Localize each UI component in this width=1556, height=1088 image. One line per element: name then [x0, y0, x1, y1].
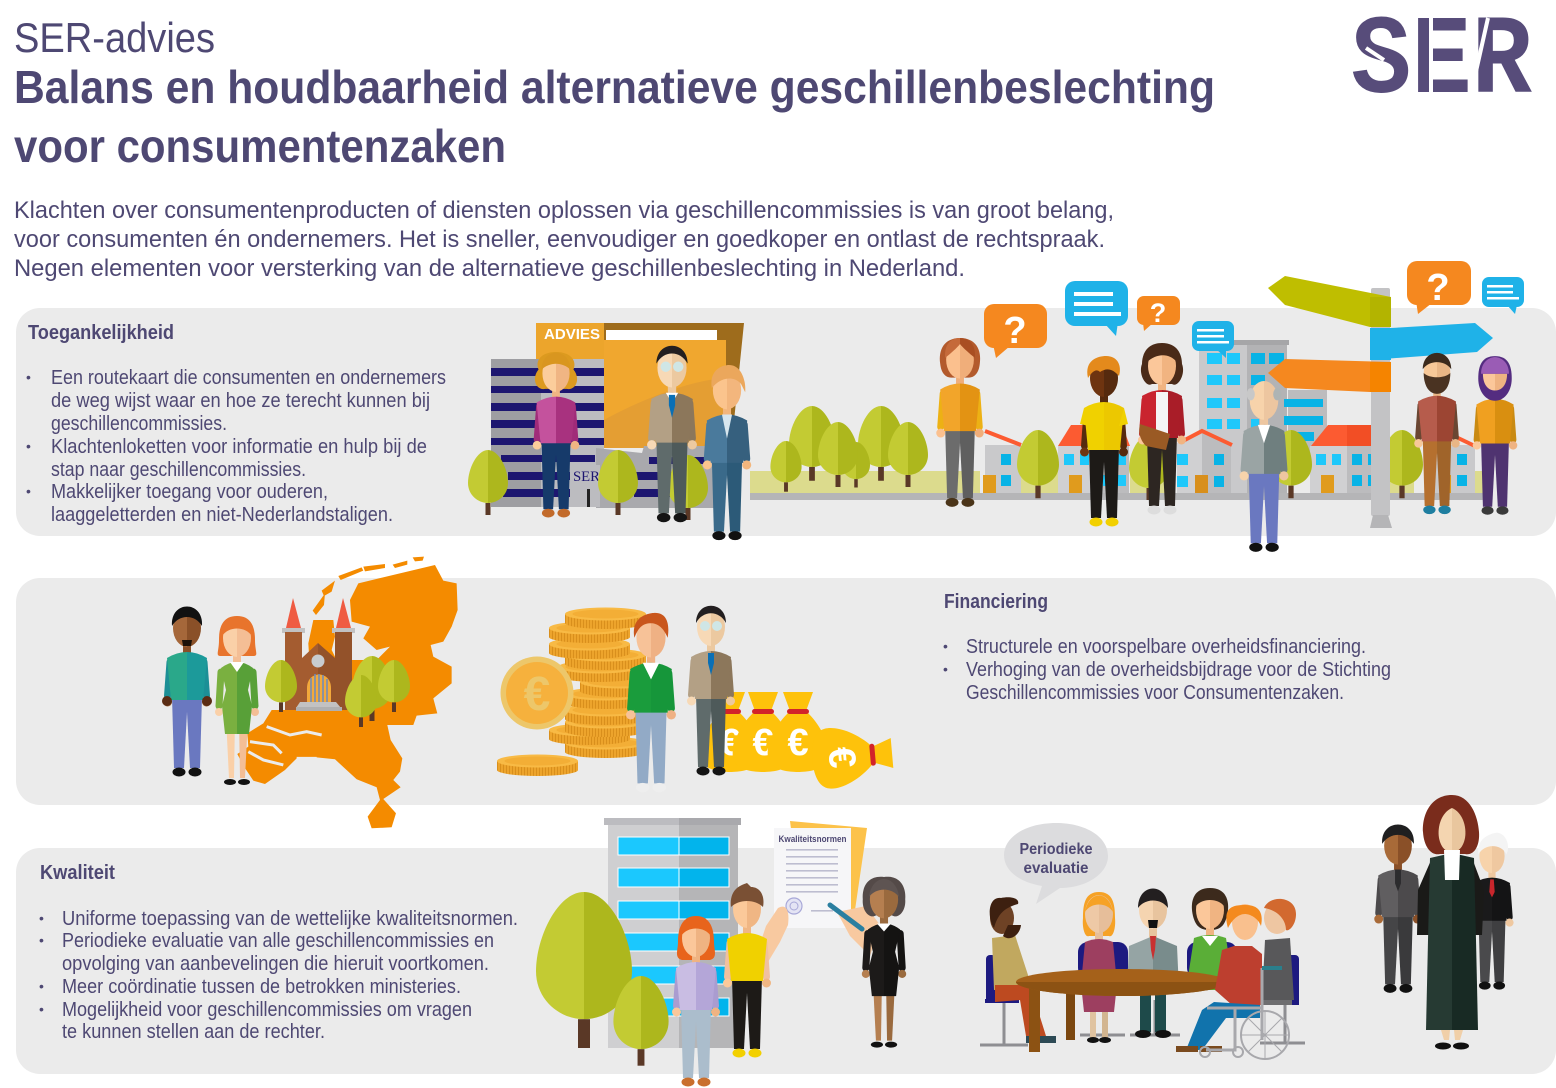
big euro coin: € — [524, 668, 550, 721]
speech bubble: question: ? — [1426, 267, 1450, 309]
text block: Toegankelijkheid: • — [26, 483, 31, 499]
text block: Kwaliteit: • — [39, 1001, 44, 1017]
woman in green sweater seated — [1186, 888, 1234, 990]
text block: Kwaliteit: Kwaliteit — [40, 862, 115, 884]
text block: Kwaliteit: opvolging van aanbevelingen die hieruit voortkomen. — [62, 953, 489, 975]
house — [1058, 425, 1130, 493]
tower block — [1199, 340, 1327, 493]
subtitle: SER-advies — [14, 14, 215, 61]
text block: Toegankelijkheid: • — [26, 369, 31, 385]
text block: Kwaliteit: Uniforme toepassing van de wettelijke kwaliteitsnormen. — [62, 908, 518, 930]
text block: Financiering: • — [943, 638, 948, 654]
person: boy in yellow shirt — [723, 883, 771, 1058]
text block: Toegankelijkheid: Een routekaart die consumenten en ondernemers — [51, 367, 446, 389]
person: man in yellow shirt — [1080, 356, 1128, 526]
speech bubble: Periodieke evaluatie — [1004, 823, 1108, 904]
text block: Toegankelijkheid: laaggeletterden en niet-Nederlandstaligen. — [51, 504, 393, 526]
illustration: ADVIES building — [468, 323, 744, 520]
panel: Kwaliteit — [16, 848, 1556, 1074]
illustration: meeting table with people — [980, 888, 1305, 1059]
panel: Toegankelijkheid — [16, 308, 1556, 536]
person: woman in red jacket with bag — [1138, 343, 1186, 514]
text block: Kwaliteit: • — [39, 910, 44, 926]
text block: Kwaliteit: Mogelijkheid voor geschillencommissies om vragen — [62, 999, 472, 1021]
illustration: ADVIES building: SER — [573, 469, 600, 485]
signpost with arrows — [1268, 276, 1493, 528]
text block: Kwaliteit: te kunnen stellen aan de rechter. — [62, 1021, 325, 1043]
speech bubble: question — [1137, 296, 1180, 331]
text block: Kwaliteit — [39, 862, 518, 1043]
arrow: orange — [1268, 359, 1391, 392]
intro text: Klachten over consumentenproducten of diensten oplossen via geschillencommissies is van groot belang, — [14, 197, 1114, 224]
person: old man in grey jacket — [1240, 381, 1288, 552]
illustration: street with houses and trees — [750, 340, 1490, 500]
text block: Toegankelijkheid: de weg wijst waar en hoe ze terecht kunnen bij — [51, 390, 430, 412]
SER logo: SER — [1351, 0, 1533, 126]
person: bearded man — [1414, 353, 1460, 514]
text block: Kwaliteit: • — [39, 978, 44, 994]
chairs — [985, 942, 1299, 1005]
speech bubble: question — [1407, 261, 1471, 314]
arrow: blue — [1370, 323, 1493, 360]
main title: voor consumentenzaken — [14, 120, 506, 172]
panel: Financiering — [16, 578, 1556, 805]
speech bubble: text lines — [1065, 281, 1128, 336]
person: man in blue suit — [703, 365, 751, 540]
man in profile behind — [1262, 899, 1296, 1005]
person: woman in pink — [533, 352, 579, 517]
man in grey jacket seated — [1127, 888, 1179, 1038]
illustration: document Kwaliteitsnormen — [758, 821, 880, 962]
text block: Kwaliteit: Periodieke evaluatie van alle geschillencommissies en — [62, 930, 494, 952]
text block: Toegankelijkheid: Toegankelijkheid — [28, 322, 174, 344]
text block: Kwaliteit: • — [39, 932, 44, 948]
person: woman in black dress — [862, 877, 906, 1048]
person: man in teal sweater — [162, 606, 212, 776]
speech bubble: question: ? — [1003, 310, 1027, 352]
arrow: green — [1268, 276, 1391, 327]
person: man in dark suit — [1374, 825, 1422, 993]
text block: Toegankelijkheid — [26, 322, 446, 526]
person: woman in orange top — [936, 338, 984, 507]
house — [983, 431, 1021, 493]
illustration: office tower with trees — [536, 818, 741, 1066]
table — [1016, 969, 1228, 1052]
person: man in green sweater — [626, 613, 676, 792]
illustration: document Kwaliteitsnormen: Kwaliteitsnormen — [778, 834, 847, 845]
person: woman in green dress — [215, 616, 259, 785]
intro text: voor consumenten én ondernemers. Het is sneller, eenvoudiger en goedkoper en ontlast de rechtspraak. — [14, 226, 1105, 253]
person: woman in lilac top — [672, 916, 720, 1086]
illustration: church with trees — [265, 598, 410, 727]
person: man in tan jacket — [687, 606, 735, 776]
speech bubble: Periodieke evaluatie: Periodieke — [1020, 841, 1093, 858]
text block: Financiering: Verhoging van de overheidsbijdrage voor de Stichting — [966, 659, 1391, 681]
person: woman with hijab — [1473, 356, 1517, 515]
hand holding document — [758, 907, 788, 962]
man with beard seated — [990, 897, 1056, 1043]
header title block — [14, 14, 1215, 172]
text block: Toegankelijkheid: stap naar geschillencommissies. — [51, 459, 306, 481]
text block: Toegankelijkheid: Makkelijker toegang voor ouderen, — [51, 481, 328, 503]
person: judge in gown — [1417, 795, 1484, 1050]
intro text: Negen elementen voor versterking van de alternatieve geschillenbeslechting in Nederland. — [14, 255, 965, 282]
map of the Netherlands — [237, 557, 458, 828]
illustration: money bags — [700, 692, 895, 790]
text block: Toegankelijkheid: Klachtenloketten voor informatie en hulp bij de — [51, 436, 427, 458]
illustration: coin stack — [497, 608, 661, 776]
speech bubble: question — [984, 304, 1047, 358]
hand with pen — [830, 905, 880, 956]
text block: Toegankelijkheid: • — [26, 438, 31, 454]
text block: Financiering: • — [943, 661, 948, 677]
speech bubble: text lines — [1192, 321, 1234, 358]
person: man in tan jacket — [647, 346, 697, 522]
main title — [14, 61, 1215, 172]
text block: Financiering: Geschillencommissies voor Consumentenzaken. — [966, 682, 1344, 704]
text block: Kwaliteit: Meer coördinatie tussen de betrokken ministeries. — [62, 976, 461, 998]
text block: Toegankelijkheid: geschillencommissies. — [51, 413, 227, 435]
speech bubble: text lines — [1482, 277, 1524, 314]
text block: Financiering — [943, 591, 1391, 704]
text block: Financiering: Structurele en voorspelbare overheidsfinanciering. — [966, 636, 1366, 658]
big euro coin — [500, 656, 574, 730]
speech bubble: question: ? — [1150, 298, 1166, 328]
text block: Financiering: Financiering — [944, 591, 1048, 613]
person: older man behind — [1470, 833, 1514, 990]
house — [1177, 431, 1232, 493]
intro text — [14, 197, 1114, 282]
main title: Balans en houdbaarheid alternatieve geschillenbeslechting — [14, 61, 1215, 113]
house — [1430, 437, 1477, 493]
man in wheelchair — [1176, 904, 1289, 1059]
illustration: ADVIES building: ADVIES — [544, 326, 600, 343]
house — [1310, 425, 1372, 493]
speech bubble: Periodieke evaluatie: evaluatie — [1024, 860, 1089, 877]
woman in maroon dress seated — [1081, 892, 1117, 1043]
